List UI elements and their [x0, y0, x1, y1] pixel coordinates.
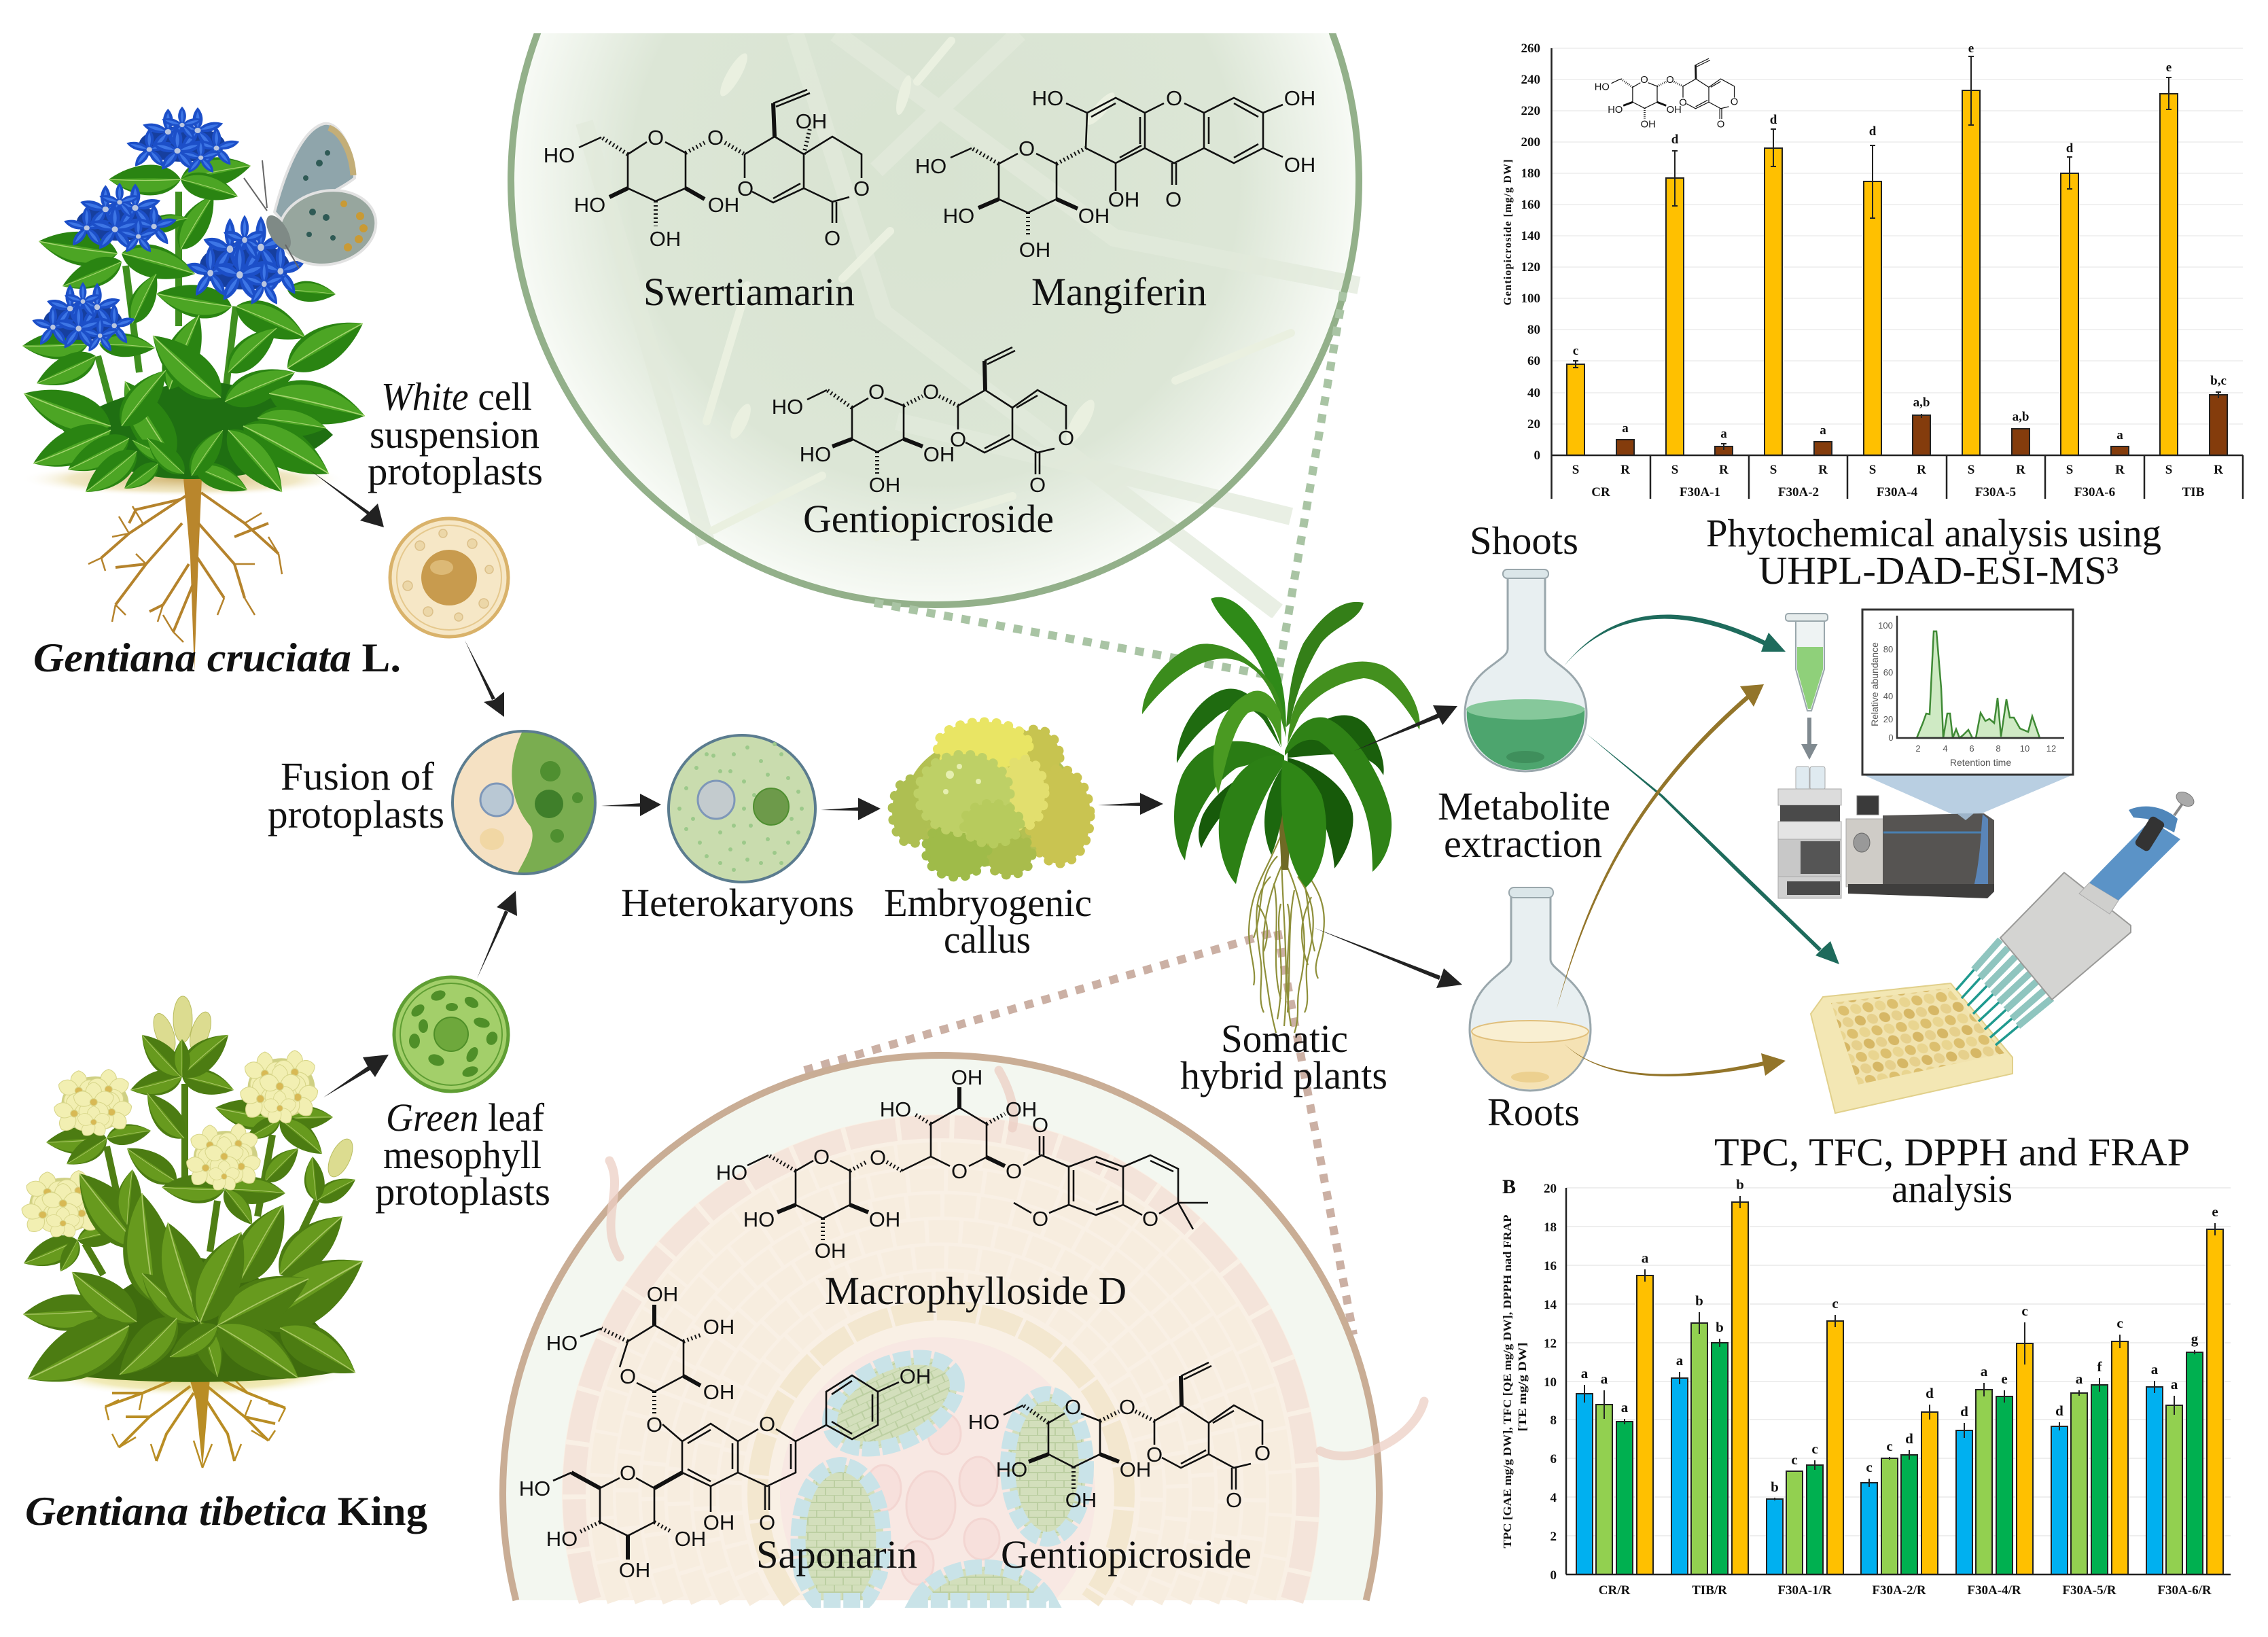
molecule: Saponarin: O	[620, 1365, 636, 1388]
molecule: Mangiferin: HO	[915, 154, 946, 178]
label: Fusion of protoplasts	[268, 754, 444, 837]
icon: multichannel pipette	[1956, 789, 2197, 1045]
molecule: Macrophylloside D: OH	[815, 1239, 846, 1263]
significance letters: c	[1811, 1441, 1818, 1457]
significance letters: b	[1695, 1292, 1703, 1309]
category labels: F30A-4/R	[1967, 1583, 2021, 1598]
category labels: S	[1671, 463, 1678, 477]
brown root bars	[1616, 395, 2227, 455]
significance letters: c	[2021, 1303, 2028, 1319]
category labels: R	[1620, 463, 1630, 477]
category labels: S	[1968, 463, 1974, 477]
significance letters: d	[1869, 124, 1877, 139]
y axis ticks: 6	[1551, 1452, 1557, 1466]
molecule: Mangiferin: HO	[1032, 86, 1063, 110]
significance letters	[1581, 1176, 2218, 1495]
molecule: Mangiferin: OH	[1108, 188, 1139, 211]
label: Embryogenic callus	[884, 881, 1092, 962]
panel: leaf tissue zoom with secoiridoids	[511, 0, 1359, 612]
flower clusters	[31, 107, 306, 353]
molecule: Swertiamarin: HO	[574, 193, 605, 217]
significance letters: a	[2116, 428, 2123, 442]
category labels: S	[1869, 463, 1876, 477]
arrow: callus to plant	[1098, 793, 1163, 815]
molecule: Gentiopicroside root: OH	[1065, 1488, 1097, 1512]
significance letters: c	[2116, 1315, 2123, 1331]
arrow: heterokaryon to callus	[821, 798, 881, 820]
panel letter: B	[1502, 1176, 1516, 1198]
category labels: R	[2214, 463, 2223, 477]
category labels: S	[2066, 463, 2073, 477]
significance letters: a	[1676, 1352, 1684, 1369]
significance letters: f	[2097, 1358, 2102, 1375]
molecule: Saponarin: OH	[703, 1380, 734, 1404]
icon: mass spectrometer	[1846, 796, 1994, 898]
molecule: Swertiamarin: O	[853, 177, 870, 200]
significance letters: d	[2055, 1403, 2063, 1419]
category labels: F30A-5/R	[2062, 1583, 2116, 1598]
yellow shoot bars	[1567, 90, 2178, 455]
molecule: Saponarin: HO	[546, 1527, 578, 1551]
molecule: Gentiopicroside root	[968, 1362, 1271, 1512]
significance letters	[1573, 41, 2227, 442]
rosette mass	[61, 381, 333, 479]
illustration: shoots flask	[1465, 569, 1587, 771]
label: Gentiopicroside root: Gentiopicroside	[1001, 1532, 1252, 1577]
inset molecule: Gentiopicroside	[1595, 58, 1738, 130]
y axis ticks: 180	[1521, 166, 1540, 181]
molecule: Saponarin: O	[759, 1511, 775, 1534]
molecule: Gentiopicroside root: O	[1065, 1395, 1081, 1419]
label: Somatic hybrid plants	[1180, 1017, 1387, 1097]
molecule: Gentiopicroside root: OH	[1120, 1458, 1151, 1481]
significance letters: b	[1716, 1319, 1724, 1335]
cell: heterokaryon	[669, 735, 815, 882]
molecule: Mangiferin	[915, 86, 1315, 262]
label: Metabolite extraction	[1438, 784, 1610, 866]
label: White cell suspension protoplasts: White cell	[381, 374, 532, 419]
chart: chromatogram: 8	[1996, 743, 2001, 754]
molecule: Mangiferin: O	[1018, 137, 1035, 160]
significance letters: b,c	[2210, 374, 2227, 388]
molecule: Mangiferin: O	[1165, 188, 1182, 211]
y axis ticks	[1521, 41, 1540, 463]
label: Somatic hybrid plants: Somatic	[1221, 1017, 1348, 1061]
y axis ticks: 12	[1544, 1337, 1557, 1351]
label: Somatic hybrid plants: hybrid plants	[1180, 1053, 1387, 1097]
molecule: Gentiopicroside leaf: OH	[923, 442, 955, 466]
label: Heterokaryons: Heterokaryons	[621, 881, 854, 925]
molecule: Macrophylloside D: O	[813, 1145, 830, 1169]
significance letters: c	[1886, 1438, 1893, 1454]
light green TFC bars	[1596, 1323, 2182, 1574]
chart: chromatogram: 60	[1883, 667, 1893, 677]
chart: chromatogram: 2	[1915, 743, 1921, 754]
significance letters: d	[1905, 1430, 1913, 1447]
label: Phytochemical analysis: Phytochemical analysis using	[1706, 511, 2161, 555]
molecule: Macrophylloside D: HO	[880, 1097, 911, 1121]
significance letters: a	[1981, 1363, 1988, 1379]
y axis ticks: 0	[1551, 1568, 1557, 1583]
molecule: Macrophylloside D: O	[870, 1146, 886, 1169]
molecule: Mangiferin: OH	[1019, 238, 1050, 262]
label: Fusion of protoplasts: protoplasts	[268, 792, 444, 837]
y axis title	[1501, 1215, 1529, 1548]
significance letters: a	[1642, 1250, 1649, 1266]
label: Macrophylloside D: Macrophylloside D	[825, 1269, 1127, 1313]
chart: chromatogram: 6	[1969, 743, 1974, 754]
category labels: F30A-1/R	[1777, 1583, 1832, 1598]
molecule: Macrophylloside D: OH	[951, 1066, 982, 1089]
y axis ticks: 200	[1521, 135, 1540, 149]
significance letters: c	[1573, 344, 1578, 358]
arrow: plant to roots flask	[1313, 928, 1462, 988]
blue TPC bars	[1576, 1378, 2163, 1574]
inset molecule: Gentiopicroside: O	[1731, 97, 1738, 108]
significance letters: a	[1720, 427, 1727, 441]
category labels: F30A-6	[2074, 485, 2115, 499]
category labels: F30A-4	[1877, 485, 1918, 499]
y axis ticks: 260	[1521, 41, 1540, 56]
molecule: Gentiopicroside root: O	[1254, 1441, 1271, 1465]
y axis ticks: 100	[1521, 292, 1540, 306]
yellow FRAP bars	[1637, 1202, 2223, 1574]
illustration: somatic hybrid plant	[1142, 597, 1420, 1033]
molecule: Macrophylloside D: HO	[716, 1161, 747, 1184]
category labels: S	[1572, 463, 1579, 477]
category labels: CR	[1591, 485, 1610, 499]
y axis ticks: 14	[1544, 1298, 1557, 1312]
rosette mass	[41, 1257, 350, 1382]
arrow: roots extract to LC-MS	[1557, 684, 1764, 1009]
category labels: TIB	[2182, 485, 2205, 499]
inset molecule: Gentiopicroside: HO	[1608, 105, 1623, 116]
y axis ticks: 160	[1521, 198, 1540, 212]
molecule: Saponarin: O	[759, 1412, 775, 1436]
label: Shoots: Shoots	[1470, 518, 1578, 563]
inset molecule: Gentiopicroside: HO	[1595, 82, 1610, 93]
panel: root cross-section zoom	[503, 1055, 1379, 1600]
significance letters: a,b	[1913, 395, 1930, 410]
molecule: Saponarin: OH	[703, 1315, 734, 1339]
arrow: shoots extract to LC-MS	[1564, 614, 1786, 666]
significance letters: d	[1926, 1385, 1934, 1401]
category labels: F30A-2/R	[1872, 1583, 1926, 1598]
chart: chromatogram: Retention time	[1950, 757, 2011, 768]
significance letters: c	[1791, 1451, 1798, 1468]
label: Metabolite extraction: extraction	[1444, 822, 1602, 866]
significance letters: a	[1601, 1371, 1608, 1387]
y axis ticks: 40	[1527, 386, 1540, 400]
molecule: Gentiopicroside leaf: O	[923, 380, 939, 404]
significance letters: e	[2212, 1203, 2218, 1220]
y axis ticks: 60	[1527, 354, 1540, 368]
significance letters: c	[1832, 1295, 1839, 1312]
molecule: Macrophylloside D: O	[951, 1159, 968, 1183]
molecule: Saponarin: OH	[619, 1558, 650, 1582]
molecule: Swertiamarin: O	[737, 177, 754, 200]
molecule: Mangiferin: OH	[1078, 204, 1110, 228]
buds	[149, 996, 357, 1180]
molecule: Macrophylloside D: OH	[869, 1208, 900, 1231]
icon: microplate	[1811, 983, 2013, 1113]
molecule: Swertiamarin: OH	[796, 109, 827, 133]
molecule: Saponarin	[519, 1282, 931, 1582]
category labels: R	[2115, 463, 2125, 477]
chart: chromatogram	[1862, 610, 2073, 775]
molecule: Swertiamarin: O	[707, 126, 724, 149]
molecule: Gentiopicroside leaf	[772, 347, 1074, 497]
molecule: Saponarin: HO	[546, 1331, 578, 1355]
label: Green leaf mesophyll protoplasts: Green leaf	[386, 1095, 545, 1140]
label: Green leaf mesophyll protoplasts: protoplasts	[375, 1169, 550, 1214]
significance letters: c	[1866, 1459, 1873, 1475]
label: Roots: Roots	[1487, 1090, 1580, 1134]
label: Green leaf mesophyll protoplasts	[375, 1095, 550, 1214]
molecule: Mangiferin: OH	[1284, 86, 1315, 110]
illustration: Gentiana cruciata plant	[16, 107, 372, 671]
illustration: embryogenic callus	[892, 722, 1091, 877]
label: TPC, TFC, DPPH and FRAP analysis	[1714, 1130, 2190, 1211]
chart: chromatogram: 100	[1878, 620, 1893, 631]
label: Phytochemical analysis: UHPL-DAD-ESI-MS³	[1758, 548, 2119, 593]
molecule: Swertiamarin: O	[824, 226, 840, 250]
label: Embryogenic callus: callus	[944, 917, 1031, 962]
category labels: F30A-5	[1975, 485, 2016, 499]
label: Embryogenic callus: Embryogenic	[884, 881, 1092, 925]
category labels: F30A-1	[1680, 485, 1720, 499]
significance letters: e	[1968, 41, 1974, 56]
molecule: Gentiopicroside root: O	[1226, 1488, 1242, 1512]
y axis ticks: 240	[1521, 73, 1540, 87]
y axis ticks	[1544, 1182, 1557, 1583]
molecule: Swertiamarin	[544, 90, 870, 251]
dotted connector: leaf zoom to plant	[874, 292, 1343, 680]
category labels: F30A-6/R	[2157, 1583, 2212, 1598]
significance letters: e	[2001, 1371, 2008, 1387]
cell: green protoplast	[394, 977, 508, 1091]
molecule: Macrophylloside D: O	[1006, 1159, 1022, 1183]
category labels: R	[1917, 463, 1926, 477]
inset molecule: Gentiopicroside: OH	[1641, 119, 1656, 130]
molecule: Macrophylloside D: O	[1032, 1207, 1048, 1231]
significance letters: a	[1622, 421, 1629, 436]
molecule: Macrophylloside D: OH	[1006, 1097, 1037, 1121]
molecule: Gentiopicroside leaf: O	[950, 427, 966, 451]
molecule: Gentiopicroside leaf: O	[1058, 426, 1074, 450]
label: Saponarin: Saponarin	[756, 1532, 917, 1577]
molecule: Mangiferin: O	[1166, 86, 1182, 110]
label: TPC, TFC, DPPH and FRAP analysis: TPC, TFC, DPPH and FRAP	[1714, 1130, 2190, 1174]
molecule: Macrophylloside D: O	[1032, 1113, 1048, 1137]
y axis ticks: 18	[1544, 1220, 1557, 1235]
y axis title: [TE mg/g DW]	[1516, 1343, 1529, 1431]
cell: white protoplast	[390, 518, 508, 637]
molecule: Saponarin: O	[646, 1413, 662, 1437]
molecule: Gentiopicroside leaf: O	[868, 380, 885, 404]
significance letters: d	[1960, 1403, 1968, 1420]
molecule: Macrophylloside D	[716, 1066, 1208, 1263]
cell: fused protoplast	[451, 730, 597, 875]
significance letters: a	[2076, 1371, 2083, 1387]
inset molecule: Gentiopicroside: O	[1666, 75, 1674, 86]
molecule: Saponarin: OH	[675, 1527, 706, 1551]
chart: chromatogram: 4	[1943, 743, 1948, 754]
significance letters: a	[1581, 1365, 1589, 1381]
y axis ticks: 0	[1534, 448, 1540, 463]
molecule: Gentiopicroside leaf: HO	[800, 442, 831, 466]
y axis ticks: 2	[1551, 1530, 1557, 1544]
y axis ticks: 10	[1544, 1375, 1557, 1390]
chart: chromatogram: 20	[1883, 714, 1893, 724]
molecule: Gentiopicroside root: O	[1119, 1395, 1135, 1419]
significance letters: a	[1820, 423, 1826, 438]
category labels	[1572, 463, 2223, 499]
category labels: S	[1770, 463, 1777, 477]
icon: HPLC stack	[1778, 767, 1841, 898]
y axis title: TPC [GAE mg/g DW], TFC [QE mg/g DW], DPPH nad FRAP	[1501, 1215, 1514, 1548]
y axis ticks: 20	[1544, 1182, 1557, 1196]
y axis ticks: 140	[1521, 229, 1540, 243]
illustration: butterfly	[244, 124, 383, 274]
label: Phytochemical analysis	[1706, 511, 2161, 593]
dark green DPPH bars	[1616, 1343, 2203, 1574]
arrow: roots extract to plate assay	[1564, 1044, 1786, 1076]
chart: chromatogram: 80	[1883, 644, 1893, 654]
molecule: Gentiopicroside leaf: OH	[869, 473, 900, 497]
category labels	[1599, 1583, 2212, 1598]
y axis ticks: 8	[1551, 1413, 1557, 1428]
y axis ticks: 4	[1551, 1491, 1557, 1505]
arrow: fusion to heterokaryon	[601, 794, 661, 816]
molecule: Saponarin: OH	[647, 1282, 678, 1306]
molecule: Saponarin: OH	[703, 1511, 734, 1534]
chart: chromatogram: 12	[2046, 743, 2056, 754]
category labels: R	[1719, 463, 1729, 477]
significance letters: d	[1671, 133, 1679, 147]
label: TPC, TFC, DPPH and FRAP analysis: analysis	[1892, 1167, 2013, 1211]
chart: chromatogram: 10	[2020, 743, 2030, 754]
molecule: Gentiopicroside leaf: O	[1029, 473, 1046, 497]
arrow: tibetica to green protoplast	[323, 1055, 389, 1097]
significance letters: b	[1736, 1176, 1744, 1193]
label: Metabolite extraction: Metabolite	[1438, 784, 1610, 828]
molecule: Swertiamarin: OH	[650, 227, 681, 251]
icon: sample tube	[1786, 614, 1828, 711]
significance letters: a	[1621, 1399, 1629, 1415]
category labels: R	[1818, 463, 1828, 477]
y axis title: Gentiopicroside [mg/g DW]	[1502, 159, 1514, 306]
highlight: MS data cone	[1864, 775, 2072, 820]
illustration: Gentiana tibetica plant	[16, 996, 377, 1468]
molecule: Saponarin: HO	[519, 1477, 550, 1500]
arrow: shoots extract to plate assay	[1586, 733, 1839, 964]
illustration: roots flask	[1470, 887, 1591, 1091]
flower clusters cream	[19, 1051, 320, 1240]
molecule: Swertiamarin: O	[648, 126, 664, 149]
molecule: Saponarin: OH	[900, 1365, 931, 1388]
label: Gentiana tibetica King: Gentiana tibetica King	[25, 1489, 427, 1534]
significance letters: d	[2066, 141, 2074, 156]
molecule: Gentiopicroside root: HO	[968, 1410, 999, 1434]
significance letters: d	[1770, 113, 1777, 127]
chart: chromatogram: Relative abundance	[1869, 642, 1880, 726]
y axis ticks: 20	[1527, 417, 1540, 432]
molecule: Mangiferin: HO	[943, 204, 974, 228]
root hairs	[609, 1070, 1424, 1456]
chart: gentiopicroside bars (A)	[1502, 41, 2243, 499]
label: Swertiamarin: Swertiamarin	[643, 270, 855, 314]
significance letters: g	[2191, 1331, 2199, 1347]
molecule: Macrophylloside D: O	[1142, 1207, 1158, 1231]
label: White cell suspension protoplasts	[368, 374, 543, 493]
chart: antioxidant bars (B)	[1501, 1176, 2231, 1598]
label: White cell suspension protoplasts: protoplasts	[368, 449, 543, 493]
arrow: plant to shoots flask	[1354, 705, 1457, 751]
label: Gentiopicroside leaf: Gentiopicroside	[803, 497, 1054, 541]
y axis ticks: 16	[1544, 1259, 1557, 1273]
significance letters: e	[2166, 60, 2172, 75]
significance letters: a	[2151, 1361, 2159, 1377]
category labels: R	[2016, 463, 2025, 477]
inset molecule: Gentiopicroside: OH	[1667, 105, 1682, 116]
y axis ticks: 220	[1521, 104, 1540, 118]
significance letters: b	[1771, 1479, 1779, 1495]
molecule: Gentiopicroside leaf: HO	[772, 395, 803, 419]
significance letters: a	[2171, 1376, 2178, 1392]
arrow: cruciata to white protoplast	[309, 470, 384, 527]
category labels: F30A-2	[1778, 485, 1819, 499]
molecule: Gentiopicroside root: O	[1146, 1443, 1163, 1466]
molecule: Mangiferin: OH	[1284, 153, 1315, 177]
dotted connector: root zoom to plant	[804, 931, 1353, 1335]
y axis ticks: 120	[1521, 260, 1540, 275]
significance letters: a,b	[2013, 410, 2029, 424]
label: Mangiferin: Mangiferin	[1031, 270, 1207, 314]
category labels: TIB/R	[1692, 1583, 1727, 1598]
y axis ticks: 80	[1527, 323, 1540, 337]
label: Gentiana cruciata L.: Gentiana cruciata L.	[33, 635, 401, 680]
inset molecule: Gentiopicroside: O	[1717, 119, 1724, 130]
inset molecule: Gentiopicroside: O	[1640, 75, 1648, 86]
arrow: tube to LC-MS	[1801, 718, 1818, 760]
chart: chromatogram: 0	[1888, 733, 1894, 743]
molecule: Gentiopicroside root: HO	[996, 1458, 1027, 1481]
molecule: Saponarin: O	[620, 1461, 636, 1485]
label: Green leaf mesophyll protoplasts: mesophyll	[383, 1133, 542, 1177]
category labels: S	[2165, 463, 2172, 477]
label: Fusion of protoplasts: Fusion of	[281, 754, 435, 798]
arrow: green protoplast to fusion	[477, 891, 517, 979]
molecule: Swertiamarin: HO	[544, 143, 575, 167]
inset molecule: Gentiopicroside: O	[1679, 97, 1687, 108]
category labels: CR/R	[1599, 1583, 1630, 1598]
label: White cell suspension protoplasts: suspension	[370, 412, 539, 457]
molecule: Swertiamarin: OH	[708, 193, 739, 217]
arrow: white protoplast to fusion	[465, 640, 504, 717]
chart: chromatogram: 40	[1883, 691, 1893, 701]
molecule: Macrophylloside D: HO	[743, 1208, 775, 1231]
